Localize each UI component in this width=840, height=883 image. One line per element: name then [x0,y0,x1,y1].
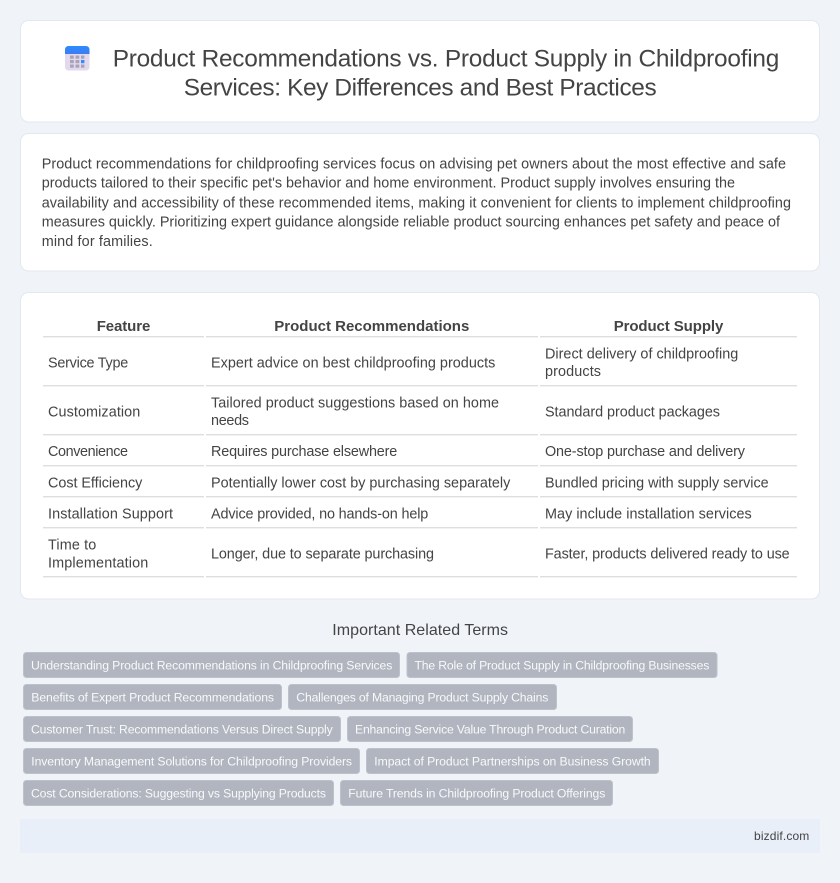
table row: time to implementation [43,537,797,577]
icon: calendar [65,46,90,70]
chip [24,716,340,742]
table row: time to implementation: Faster, products delivered ready to use [545,546,790,562]
footer bar [20,819,820,853]
text block: introduction: mind for families. [42,234,153,250]
chip: Customer Trust: Recommendations Versus Direct Supply [31,722,334,736]
chip: Cost Considerations: Suggesting vs Supplying Products [31,786,326,800]
chip [24,652,400,678]
chip [340,780,612,806]
table header row: Product Recommendations [274,318,469,335]
table row: cost efficiency: Bundled pricing with supply service [545,475,769,491]
table row: cost efficiency [43,475,797,497]
table row: customization: Standard product packages [545,404,720,420]
table row: service type [43,346,797,386]
table row: customization: Customization [48,404,140,420]
chip: Understanding Product Recommendations in Childproofing Services [31,658,392,672]
table row: time to implementation: Time to [48,537,96,553]
text block: introduction: measures quickly. Prioritizing expert guidance alongside reliable product sourcing enhances pet safety and peace of [42,215,781,231]
table row: installation support: Installation Support [48,506,173,522]
text block: introduction: Product recommendations for childproofing services focus on advising pet owners about the most effective and safe [42,156,786,172]
table row: service type: Direct delivery of childproofing [545,346,738,362]
title: Services: Key Differences and Best Practices [184,75,657,102]
footer bar: bizdif.com [754,829,809,843]
chip [288,684,556,710]
table row: convenience: Convenience [48,444,128,460]
table row: service type: Service Type [48,355,128,371]
table row: time to implementation: Implementation [48,555,148,571]
chip: Enhancing Service Value Through Product Curation [355,722,625,736]
chip: Future Trends in Childproofing Product Offerings [348,786,605,800]
table row: convenience: One-stop purchase and delivery [545,444,746,460]
table row: time to implementation: Longer, due to separate purchasing [211,546,434,562]
related terms chips [24,652,717,806]
table row: installation support [43,506,797,528]
table row: convenience [43,444,797,466]
table header row: Feature [97,318,150,335]
table row: customization: Tailored product suggestions based on home [211,395,499,411]
table header row [43,318,797,337]
table row: service type: products [545,364,601,380]
chip: Benefits of Expert Product Recommendations [31,690,274,704]
table row: installation support: May include installation services [545,506,752,522]
chip [407,652,717,678]
table row: cost efficiency: Cost Efficiency [48,475,143,491]
panel: intro paragraph [20,134,820,271]
table header row: Product Supply [614,318,724,335]
panel: comparison table [20,292,820,599]
table row: customization: needs [211,413,249,429]
chip: Challenges of Managing Product Supply Chains [296,690,548,704]
text block: introduction [42,156,791,250]
chip [24,748,360,774]
heading: important related terms: Important Related Terms [332,622,508,639]
text block: introduction: availability and accessibility of these recommended items, making it convenient for clients to implement childproofing [42,195,791,211]
text block: introduction: products tailored to their specific pet's behavior and home environment. Product supply involves ensuring the [42,176,735,192]
title: Product Recommendations vs. Product Supply in Childproofing [113,46,779,73]
chip: Inventory Management Solutions for Childproofing Providers [31,754,352,768]
chip [348,716,632,742]
chip [24,684,282,710]
panel: header [20,20,820,122]
table row: installation support: Advice provided, no hands-on help [211,506,428,522]
chip: The Role of Product Supply in Childproofing Businesses [414,658,709,672]
table row: service type: Expert advice on best childproofing products [211,355,495,371]
table row: convenience: Requires purchase elsewhere [211,444,397,460]
table row: customization [43,395,797,435]
table row: cost efficiency: Potentially lower cost by purchasing separately [211,475,511,491]
chip [24,780,334,806]
chip [366,748,658,774]
title [113,46,779,102]
chip: Impact of Product Partnerships on Business Growth [374,754,651,768]
